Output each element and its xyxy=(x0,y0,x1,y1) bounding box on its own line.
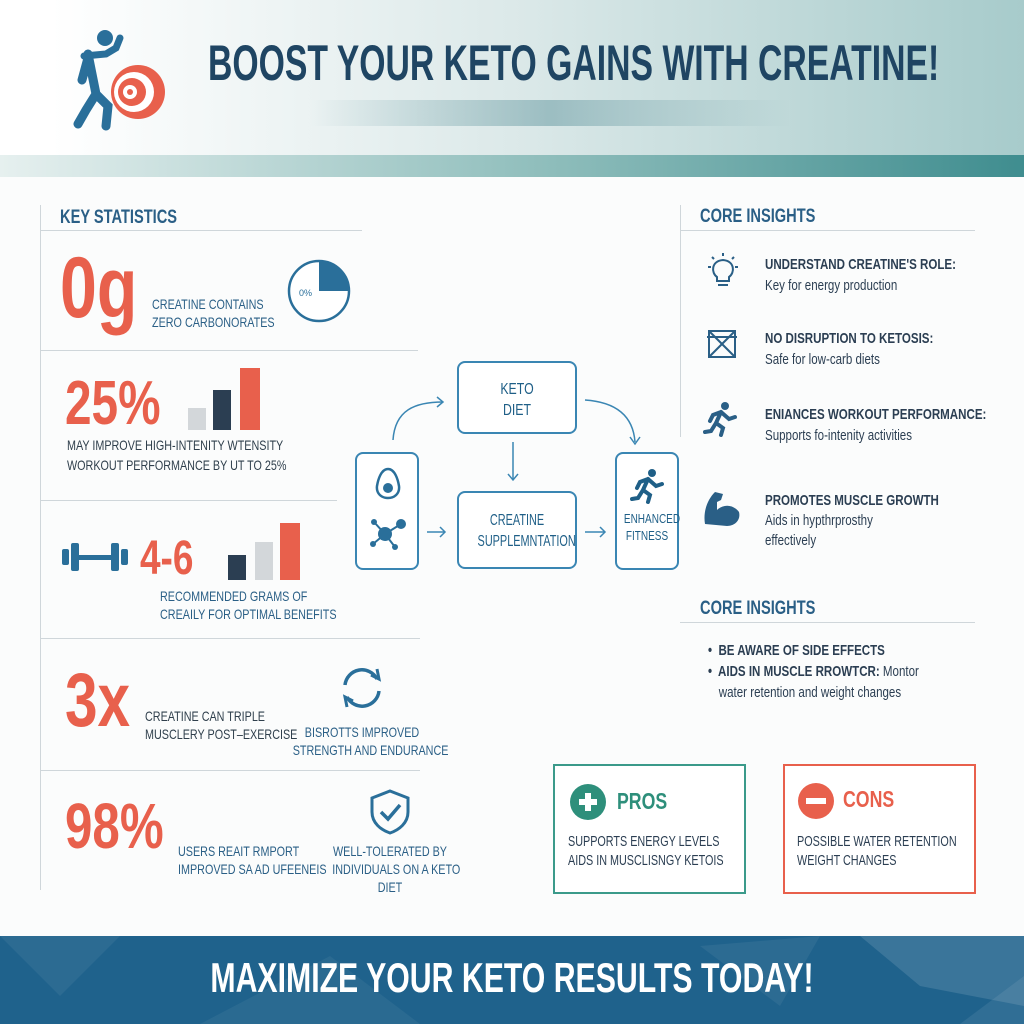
insight: workout performance: ENIANCES WORKOUT PERFORMANCE: xyxy=(765,406,986,423)
insight: workout performance: Supports fo-intenity activities xyxy=(765,427,912,444)
icon: runner xyxy=(630,469,664,504)
panel: pros: PROS xyxy=(617,788,667,814)
flowchart xyxy=(355,361,680,570)
title underline glow xyxy=(310,100,790,126)
stat: 98%: DIET xyxy=(378,879,402,895)
stat: 25%: WORKOUT PERFORMANCE BY UT TO 25% xyxy=(67,457,286,473)
left vertical rule xyxy=(40,205,41,890)
insight: workout performance xyxy=(703,402,986,444)
heading: key statistics: KEY STATISTICS xyxy=(60,207,177,228)
panel: core insights 2 xyxy=(680,598,975,701)
box: keto diet: DIET xyxy=(503,402,531,419)
stat: 0g: CREATINE CONTAINS xyxy=(152,296,264,312)
box: enhanced fitness xyxy=(615,452,679,570)
insight: understand role: Key for energy production xyxy=(765,277,897,294)
chart: pie xyxy=(288,260,350,322)
stat: 3x xyxy=(65,658,448,758)
insight: muscle growth xyxy=(704,492,939,549)
stat: 0g: 0g xyxy=(60,240,137,336)
insight: no disruption: Safe for low-carb diets xyxy=(765,351,880,368)
heading: core insights: CORE INSIGHTS xyxy=(700,598,815,619)
stat: 3x: BISROTTS IMPROVED xyxy=(305,724,419,740)
stat: 4-6 xyxy=(62,523,337,622)
icon: cycle arrows xyxy=(342,668,382,708)
footer banner xyxy=(0,936,1024,1024)
panel: core insights xyxy=(681,206,986,549)
title: BOOST YOUR KETO GAINS WITH CREATINE! xyxy=(208,35,939,91)
stat: 0g xyxy=(60,240,275,336)
stat: 3x: 3x xyxy=(65,658,130,743)
stat: 3x: MUSCLERY POST–EXERCISE xyxy=(145,726,297,742)
box: enhanced fitness: FITNESS xyxy=(626,528,668,543)
stat: 4-6: RECOMMENDED GRAMS OF xyxy=(160,588,307,604)
box: creatine supplementation xyxy=(457,491,577,569)
box: keto diet: KETO xyxy=(500,381,534,398)
box: creatine supplementation: SUPPLEMNTATION xyxy=(478,533,576,550)
stat: 0g: ZERO CARBONORATES xyxy=(152,314,275,330)
icon: shield xyxy=(370,789,410,835)
panel: pros xyxy=(553,764,746,894)
stat: 98%: INDIVIDUALS ON A KETO xyxy=(332,861,460,877)
panel: cons: CONS xyxy=(843,786,894,812)
box: keto diet xyxy=(457,361,577,434)
bullets: • AIDS IN MUSCLE RROWTCR: Montor xyxy=(708,663,919,680)
box: enhanced fitness: ENHANCED xyxy=(624,511,680,526)
box: ingredients xyxy=(355,452,419,570)
stat: 98% xyxy=(65,789,460,895)
header band xyxy=(0,155,1024,177)
panel: cons: WEIGHT CHANGES xyxy=(797,852,896,869)
stat: 25%: 25% xyxy=(65,369,161,438)
insight: muscle growth: PROMOTES MUSCLE GROWTH xyxy=(765,492,939,509)
bullets xyxy=(708,642,919,701)
heading: core insights: CORE INSIGHTS xyxy=(700,206,815,227)
right vertical rule xyxy=(680,205,681,437)
panel: cons: POSSIBLE WATER RETENTION xyxy=(797,833,957,850)
bar chart xyxy=(228,555,246,580)
bullets: • BE AWARE OF SIDE EFFECTS xyxy=(708,642,885,659)
panel: pros: SUPPORTS ENERGY LEVELS xyxy=(568,833,719,850)
icon: runner with target xyxy=(74,30,165,130)
insight: muscle growth: Aids in hypthrprosthy xyxy=(765,512,873,529)
stat: 25% xyxy=(65,368,286,473)
stat: 98%: USERS REAIT RMPORT xyxy=(178,843,299,859)
panel: pros: AIDS IN MUSCLISNGY KETOIS xyxy=(568,852,724,869)
icon: minus xyxy=(798,783,834,819)
stat: 4-6: CREAILY FOR OPTIMAL BENEFITS xyxy=(160,606,337,622)
icon: dumbbell xyxy=(62,543,128,571)
icon: avocado xyxy=(376,468,400,500)
bullets: water retention and weight changes xyxy=(719,684,901,701)
insight: understand role: UNDERSTAND CREATINE'S ROLE: xyxy=(765,256,956,273)
insight: muscle growth: effectively xyxy=(765,532,816,549)
stat: 3x: STRENGTH AND ENDURANCE xyxy=(293,742,448,758)
footer text: MAXIMIZE YOUR KETO RESULTS TODAY! xyxy=(210,954,814,1001)
insight: no disruption xyxy=(707,330,933,368)
stat: 4-6: 4-6 xyxy=(140,532,193,585)
header background xyxy=(0,0,1024,155)
stat: 98%: 98% xyxy=(65,790,164,862)
stat: 98%: WELL-TOLERATED BY xyxy=(333,843,447,859)
bar chart xyxy=(188,408,206,430)
panel: cons xyxy=(783,764,976,894)
insight: no disruption: NO DISRUPTION TO KETOSIS: xyxy=(765,330,933,347)
icon: molecule xyxy=(370,519,406,550)
insight: understand role xyxy=(708,253,956,294)
icon: plus xyxy=(570,784,606,820)
stat: 98%: IMPROVED SA AD UFEENEIS xyxy=(178,861,327,877)
chart: pie: 0% xyxy=(299,288,312,298)
box: creatine supplementation: CREATINE xyxy=(490,512,544,529)
stat: 25%: MAY IMPROVE HIGH-INTENITY WTENSITY xyxy=(67,437,283,453)
stat: 3x: CREATINE CAN TRIPLE xyxy=(145,708,265,724)
panel: key statistics xyxy=(41,207,460,895)
